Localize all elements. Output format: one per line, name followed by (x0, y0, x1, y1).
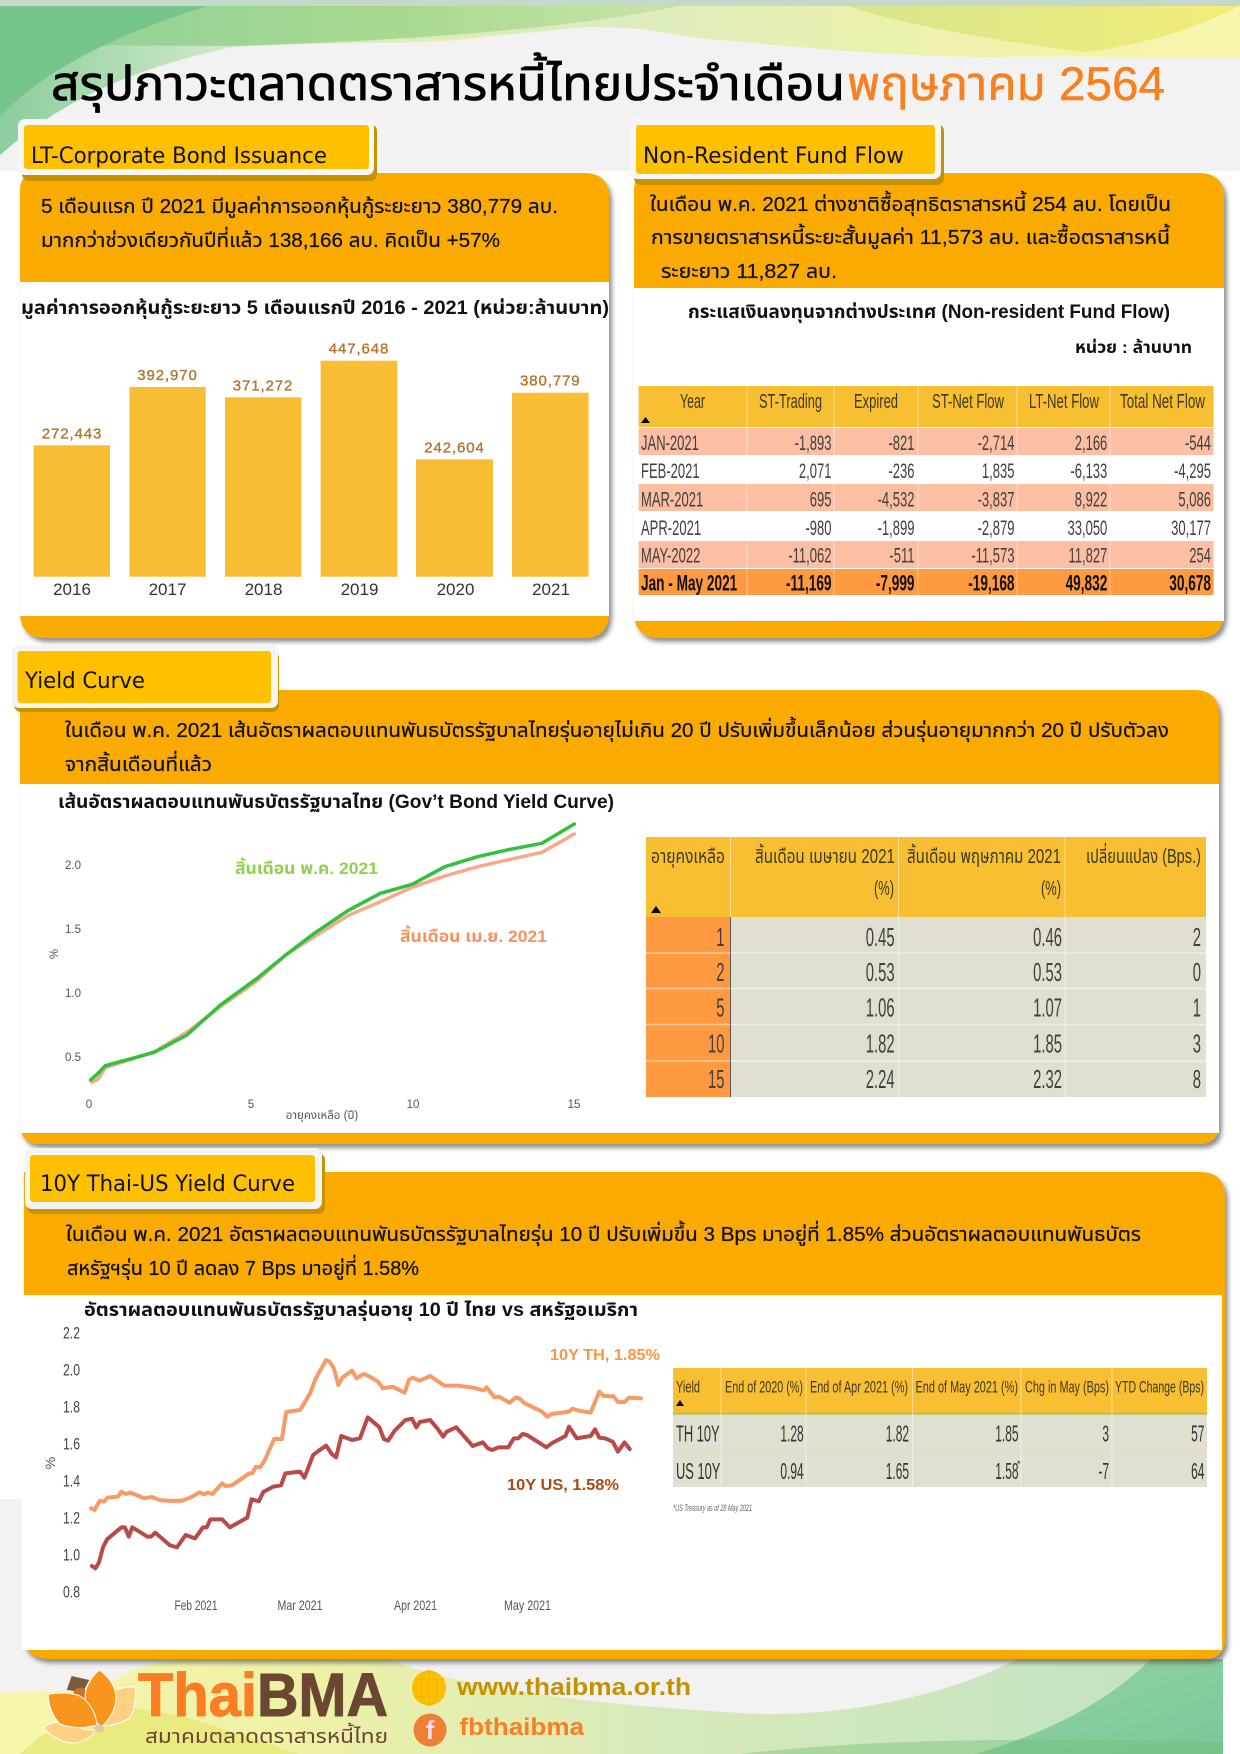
table: fund flow: LT-Net Flow (1029, 391, 1099, 413)
tab: LT-Corporate Bond Issuance (18, 119, 377, 181)
bar chart: issuance 2016-2021: 2020 (437, 580, 474, 599)
table: fund flow: Year (680, 391, 705, 413)
icon: facebook (414, 1714, 446, 1746)
table: fund flow: 2,071 (799, 459, 832, 483)
table: fund flow: APR-2021 (641, 516, 701, 540)
line chart: 10Y Thai vs US yields (42, 1325, 660, 1613)
line chart: 10Y Thai vs US yields: 1.4 (63, 1473, 80, 1491)
line chart: 10Y Thai vs US yields: 1.6 (63, 1436, 80, 1454)
table: fund flow: -1,899 (878, 516, 914, 540)
summary text: ในเดือน พ.ค. 2021 ต่างชาติซื้อสุทธิตราสารหนี้ 254 ลบ. โดยเป็น (650, 190, 1171, 216)
table: 10Y yields: 64 (1191, 1458, 1204, 1484)
logo: ThaiBMA (44, 1661, 388, 1748)
table: fund flow: 5,086 (1178, 487, 1211, 512)
line chart: government bond yield curve: 2.0 (65, 860, 81, 872)
line chart: government bond yield curve (49, 824, 580, 1122)
table: 10Y yields: 1.82 (886, 1420, 909, 1447)
line chart: government bond yield curve: 15 (568, 1099, 580, 1111)
table: yield by tenor: 8 (1193, 1066, 1201, 1094)
tab: Non-Resident Fund Flow (630, 119, 944, 185)
bar chart: issuance 2016-2021: 2019 (341, 580, 378, 599)
tab: Yield Curve: Yield Curve (24, 669, 145, 694)
table: yield by tenor: 1 (1193, 995, 1201, 1023)
table: 10Y yields: 1.28 (780, 1420, 804, 1447)
table: yield by tenor: อายุคงเหลือ (651, 846, 725, 868)
table: fund flow: -1,893 (795, 431, 832, 455)
table: yield by tenor: 2 (1193, 924, 1201, 952)
table: 10Y yields: 0.94 (780, 1458, 804, 1484)
line chart: 10Y Thai vs US yields: May 2021 (504, 1597, 551, 1613)
table: yield by tenor: 2 (716, 959, 724, 987)
table: 10Y yields: End of May 2021 (%) (916, 1378, 1018, 1397)
summary text: มากกว่าช่วงเดียวกันปีที่แล้ว 138,166 ลบ. คิดเป็น +57% (41, 226, 500, 252)
table: fund flow: ST-Trading (759, 391, 822, 413)
facebook link (414, 1714, 585, 1746)
table: fund flow: 49,832 (1066, 570, 1107, 596)
tab: Non-Resident Fund Flow: Non-Resident Fund Flow (643, 144, 904, 169)
table: 10Y yields: Chg in May (Bps) (1025, 1378, 1109, 1397)
table: yield by tenor: สิ้นเดือน พฤษภาคม 2021 (907, 843, 1061, 868)
table: yield by tenor: 0.46 (1033, 924, 1062, 952)
icon: lotus (44, 1670, 135, 1743)
bar chart: issuance 2016-2021 (34, 340, 589, 599)
bar chart: issuance 2016-2021: 2017 (149, 580, 186, 599)
facebook link: fbthaibma (460, 1714, 585, 1741)
bar chart: issuance 2016-2021: 380,779 (520, 372, 581, 389)
panel: non-resident fund flow (630, 119, 1224, 638)
table: fund flow: -11,169 (786, 570, 832, 596)
table: fund flow: -821 (888, 431, 914, 455)
table: fund flow: 11,827 (1068, 543, 1107, 568)
table: yield by tenor: 1.82 (866, 1031, 895, 1059)
bar chart: issuance 2016-2021: 2021 (532, 580, 570, 599)
table: fund flow: -2,879 (978, 516, 1014, 540)
table: 10Y yields: US 10Y (676, 1458, 721, 1484)
line chart: government bond yield curve: อายุคงเหลือ (ปี) (286, 1109, 358, 1122)
title: พฤษภาคม 2564 (847, 57, 1165, 110)
line chart: 10Y Thai vs US yields: 1.0 (63, 1547, 80, 1565)
line chart: government bond yield curve: % (49, 949, 61, 959)
title (51, 52, 1165, 112)
table: yield by tenor: 15 (708, 1066, 724, 1094)
line chart: 10Y Thai vs US yields: 1.2 (63, 1510, 80, 1528)
table: yield by tenor: 5 (716, 995, 724, 1023)
summary text: จากสิ้นเดือนที่แล้ว (65, 750, 212, 776)
table: 10Y yields: 3 (1102, 1420, 1109, 1447)
table: fund flow: -511 (889, 543, 914, 568)
table: yield by tenor: 0.45 (866, 924, 895, 952)
table: 10Y yields: TH 10Y (676, 1421, 720, 1447)
table: fund flow: -236 (888, 459, 914, 483)
line chart: government bond yield curve: สิ้นเดือน เม.ย. 2021 (400, 925, 547, 946)
table: yield by tenor: (%) (1041, 878, 1061, 900)
table: fund flow: -11,573 (971, 543, 1014, 568)
table: yield by tenor: สิ้นเดือน เมษายน 2021 (755, 843, 895, 868)
table: 10Y yields: * (1017, 1459, 1021, 1469)
footer background swoosh (0, 1499, 1223, 1754)
table: 10Y yields: Yield (676, 1378, 700, 1397)
table: fund flow: 695 (810, 487, 832, 512)
logo: ThaiBMA: BMA (257, 1661, 388, 1729)
table: yield by tenor: 0.53 (1033, 959, 1062, 987)
bar chart: issuance 2016-2021: 272,443 (42, 425, 102, 442)
logo: ThaiBMA: Thai (138, 1661, 257, 1729)
table: fund flow: -980 (805, 516, 832, 540)
table: 10Y yields: End of Apr 2021 (%) (810, 1378, 908, 1397)
icon: globe (412, 1670, 446, 1706)
line chart: government bond yield curve: 1.5 (65, 924, 81, 936)
table: yield by tenor: 0 (1193, 959, 1201, 987)
table: fund flow: -4,295 (1174, 459, 1211, 483)
table: fund flow: -544 (1185, 431, 1211, 455)
table: 10Y yields: 1.58 (995, 1458, 1018, 1484)
table: fund flow: ST-Net Flow (932, 391, 1004, 413)
table: fund flow: -2,714 (978, 431, 1015, 455)
table: fund flow: 1,835 (982, 459, 1014, 483)
summary text (65, 716, 1169, 776)
table: yield by tenor: 10 (708, 1031, 724, 1059)
website link (412, 1670, 691, 1706)
bar chart: issuance 2016-2021: 2016 (53, 580, 91, 599)
table: fund flow: 30,678 (1169, 570, 1211, 596)
bar chart: issuance 2016-2021: 242,604 (424, 440, 485, 457)
line chart: 10Y Thai vs US yields: Mar 2021 (278, 1597, 323, 1613)
table: yield by tenor: 1.06 (866, 995, 895, 1023)
line chart: 10Y Thai vs US yields: 1.8 (63, 1399, 80, 1417)
summary text (66, 1220, 1141, 1281)
logo: ThaiBMA: สมาคมตลาดตราสารหนี้ไทย (145, 1722, 388, 1748)
table: 10Y yields: End of 2020 (%) (725, 1378, 803, 1397)
table: 10Y yields: 1.85 (995, 1420, 1018, 1447)
tab: Yield Curve (12, 645, 279, 712)
unit label: หน่วย : ล้านบาท (1075, 337, 1192, 357)
chart title: อัตราผลตอบแทนพันธบัตรรัฐบาลรุ่นอายุ 10 ปี ไทย vs สหรัฐอเมริกา (84, 1299, 638, 1321)
line chart: government bond yield curve: 1.0 (65, 988, 81, 1000)
summary text: ระยะยาว 11,827 ลบ. (661, 261, 837, 283)
line chart: government bond yield curve: 0 (86, 1099, 92, 1111)
line chart: 10Y Thai vs US yields: % (42, 1457, 58, 1469)
line chart: 10Y Thai vs US yields: 10Y US, 1.58% (507, 1477, 619, 1494)
line chart: 10Y Thai vs US yields: 10Y TH, 1.85% (550, 1347, 660, 1364)
table: fund flow: -3,837 (978, 487, 1014, 512)
line chart: government bond yield curve: สิ้นเดือน พ.ค. 2021 (235, 857, 378, 878)
table: fund flow: -7,999 (876, 570, 914, 596)
table: yield by tenor (646, 837, 1206, 1097)
header background swoosh (0, 0, 1240, 171)
line chart: 10Y Thai vs US yields: Apr 2021 (394, 1597, 437, 1613)
tab: 10Y Thai-US Yield Curve: 10Y Thai-US Yield Curve (40, 1172, 295, 1197)
bar chart: issuance 2016-2021: 371,272 (233, 378, 293, 395)
tab: 10Y Thai-US Yield Curve (25, 1148, 325, 1214)
table: yield by tenor: 2.24 (866, 1066, 895, 1094)
table: fund flow: MAY-2022 (641, 543, 700, 568)
website link: www.thaibma.or.th (456, 1674, 691, 1701)
panel: yield curve (12, 645, 1219, 1144)
table: fund flow: -11,062 (788, 543, 832, 568)
table: fund flow: 33,050 (1067, 516, 1108, 540)
summary text: 5 เดือนแรก ปี 2021 มีมูลค่าการออกหุ้นกู้ระยะยาว 380,779 ลบ. (41, 195, 558, 219)
summary text (41, 195, 558, 252)
bar chart: issuance 2016-2021: 2018 (245, 580, 282, 599)
table: yield by tenor: 1.85 (1033, 1031, 1062, 1059)
table: fund flow: 2,166 (1075, 431, 1107, 455)
table title: กระแสเงินลงทุนจากต่างประเทศ (Non-resident Fund Flow) (688, 301, 1170, 323)
tab: LT-Corporate Bond Issuance: LT-Corporate Bond Issuance (31, 144, 327, 169)
table: fund flow: Jan - May 2021 (641, 570, 737, 596)
table: fund flow: FEB-2021 (641, 459, 700, 483)
table: fund flow: MAR-2021 (641, 487, 703, 512)
table: fund flow: -19,168 (968, 570, 1014, 596)
summary text: ในเดือน พ.ค. 2021 เส้นอัตราผลตอบแทนพันธบัตรรัฐบาลไทยรุ่นอายุไม่เกิน 20 ปี ปรับเพิ่มขึ้นเล็กน้อย ส่วนรุ่นอายุมากกว่า 20 ปี ปรับตัวลง (65, 716, 1169, 742)
table: yield by tenor: 1 (716, 924, 724, 952)
table: fund flow: -4,532 (878, 487, 914, 512)
table: fund flow: 30,177 (1171, 516, 1211, 540)
summary text (650, 190, 1171, 283)
table: yield by tenor: 0.53 (866, 959, 895, 987)
line chart: 10Y Thai vs US yields: 0.8 (63, 1584, 80, 1602)
bar chart: issuance 2016-2021: 392,970 (137, 367, 198, 384)
panel: 10Y Thai-US yield curve (22, 1148, 1225, 1659)
title: สรุปภาวะตลาดตราสารหนี้ไทยประจำเดือน (51, 52, 845, 112)
table: fund flow: 8,922 (1075, 487, 1107, 512)
line chart: government bond yield curve: 10 (407, 1099, 419, 1111)
line chart: 10Y Thai vs US yields: 2.0 (63, 1362, 80, 1380)
bar chart: issuance 2016-2021: 447,648 (329, 340, 389, 357)
line chart: 10Y Thai vs US yields: 2.2 (63, 1325, 80, 1343)
table: yield by tenor: 2.32 (1033, 1066, 1062, 1094)
table: fund flow: -6,133 (1070, 459, 1107, 483)
table: 10Y yields (673, 1368, 1207, 1514)
icon: facebook: f (426, 1715, 435, 1745)
summary text: การขายตราสารหนี้ระยะสั้นมูลค่า 11,573 ลบ. และซื้อตราสารหนี้ (651, 223, 1170, 250)
summary text: ในเดือน พ.ค. 2021 อัตราผลตอบแทนพันธบัตรรัฐบาลไทยรุ่น 10 ปี ปรับเพิ่มขึ้น 3 Bps มาอยู่ที่ 1.85% ส่วนอัตราผลตอบแทนพันธบัตร (66, 1220, 1141, 1247)
table: 10Y yields: 1.65 (886, 1458, 909, 1484)
chart title: มูลค่าการออกหุ้นกู้ระยะยาว 5 เดือนแรกปี 2016 - 2021 (หน่วย:ล้านบาท) (21, 297, 609, 319)
line chart: government bond yield curve: 0.5 (65, 1052, 81, 1064)
table: yield by tenor: เปลี่ยนแปลง (Bps.) (1086, 842, 1201, 868)
table: fund flow: 254 (1189, 543, 1211, 568)
table: 10Y yields: 57 (1191, 1420, 1204, 1447)
table: yield by tenor: 1.07 (1033, 995, 1062, 1023)
chart title: เส้นอัตราผลตอบแทนพันธบัตรรัฐบาลไทย (Gov’t Bond Yield Curve) (58, 791, 614, 813)
table: fund flow: Expired (854, 391, 898, 413)
panel: corporate bond issuance (18, 119, 609, 638)
line chart: government bond yield curve: 5 (248, 1099, 254, 1111)
footnote: *US Treasury as of 28 May 2021 (673, 1503, 752, 1514)
table: fund flow (639, 386, 1214, 596)
table: 10Y yields: -7 (1098, 1458, 1109, 1484)
table: yield by tenor: 3 (1193, 1031, 1201, 1059)
line chart: 10Y Thai vs US yields: Feb 2021 (174, 1597, 218, 1613)
table: fund flow: JAN-2021 (641, 431, 699, 455)
table: yield by tenor: (%) (874, 878, 894, 900)
summary text: สหรัฐฯรุ่น 10 ปี ลดลง 7 Bps มาอยู่ที่ 1.58% (67, 1254, 419, 1281)
